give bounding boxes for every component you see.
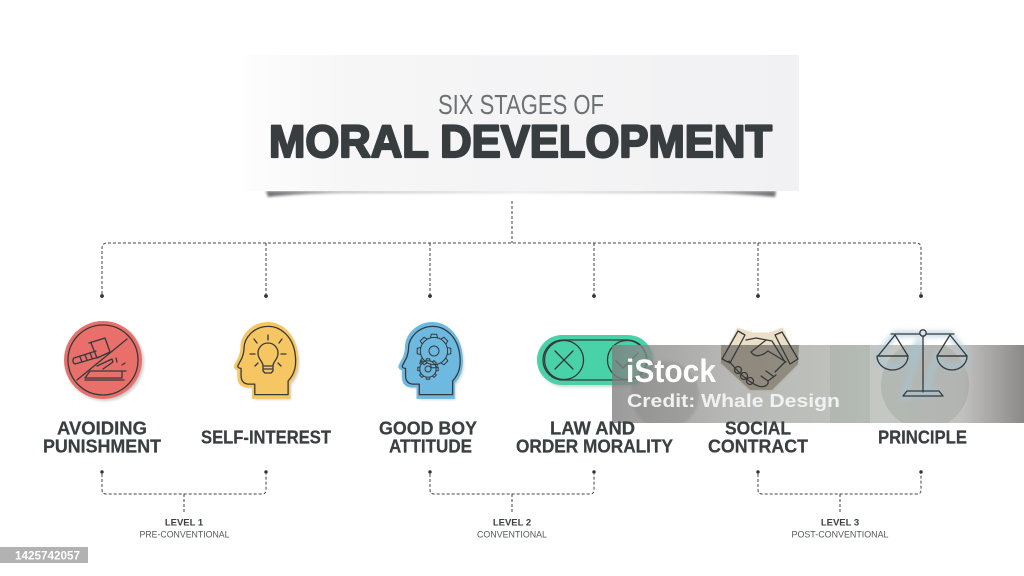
level 1 bracket	[100, 470, 268, 540]
watermark band	[612, 345, 1024, 423]
icon: head with gears	[400, 323, 464, 399]
watermark: iStock: iStock	[626, 353, 716, 389]
label: principle: PRINCIPLE	[878, 426, 967, 448]
level 3 bracket: POST-CONVENTIONAL	[792, 530, 889, 540]
icon: scales	[877, 330, 967, 396]
label: law and order morality: LAW AND	[550, 418, 635, 438]
watermark: credit: Credit: Whale Design	[627, 390, 840, 411]
title: six stages of: SIX STAGES OF	[438, 89, 604, 120]
level 2 bracket: CONVENTIONAL	[477, 530, 548, 540]
label: good boy attitude	[379, 418, 478, 456]
level 1 bracket: LEVEL 1	[165, 518, 204, 528]
level 2 bracket: LEVEL 2	[493, 518, 531, 528]
title: moral development: MORAL DEVELOPMENT	[269, 116, 772, 167]
label: good boy attitude: ATTITUDE	[389, 436, 472, 456]
label: social contract: CONTRACT	[708, 436, 809, 456]
icon: toggle	[537, 335, 655, 387]
label: good boy attitude: GOOD BOY	[379, 418, 478, 438]
title panel	[244, 55, 799, 197]
label: avoiding punishment: AVOIDING	[57, 418, 147, 438]
label: avoiding punishment: PUNISHMENT	[43, 436, 162, 456]
image id tag	[0, 547, 88, 563]
label: avoiding punishment	[43, 418, 162, 456]
level 3 bracket: LEVEL 3	[821, 518, 859, 528]
icon: head with light bulb	[235, 323, 299, 399]
watermark text	[626, 353, 840, 411]
level 3 bracket	[756, 470, 923, 540]
icon: handshake	[722, 331, 798, 387]
label: law and order morality: ORDER MORALITY	[516, 436, 674, 456]
level 2 bracket	[428, 470, 596, 540]
label: law and order morality	[516, 418, 674, 456]
label: social contract	[708, 418, 809, 456]
top connector tree	[100, 201, 923, 298]
handshake backing	[721, 329, 798, 390]
icon: no gavel	[64, 321, 144, 401]
level 1 bracket: PRE-CONVENTIONAL	[140, 530, 230, 540]
label: self-interest: SELF-INTEREST	[201, 426, 332, 448]
image id tag: 1425742057	[15, 550, 80, 562]
label: social contract: SOCIAL	[725, 418, 791, 438]
